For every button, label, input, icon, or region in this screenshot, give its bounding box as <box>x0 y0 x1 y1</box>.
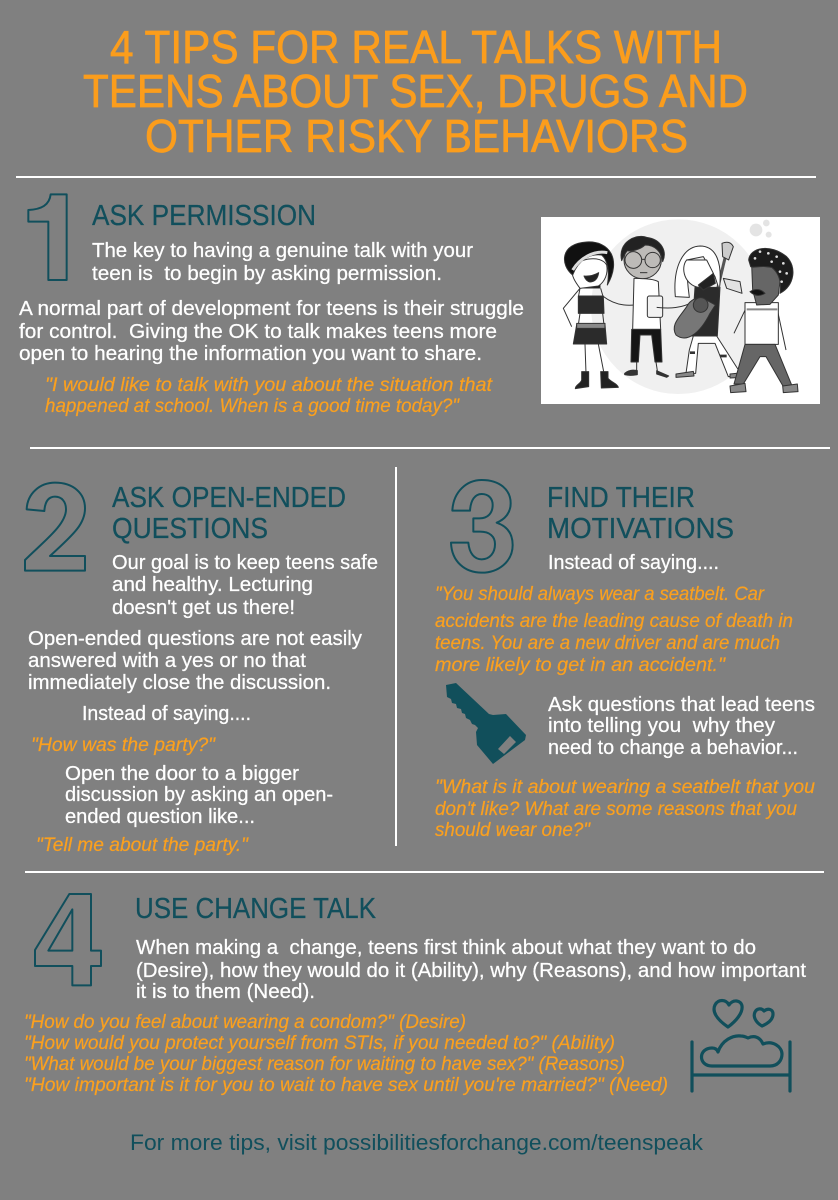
quote: change talk questions: "How would you protect yourself from STIs, if you needed to?" (Ability) <box>24 1032 615 1054</box>
quote: permission example: happened at school. When is a good time today?" <box>45 395 460 417</box>
quote: seatbelt question: don't like? What are some reasons that you <box>435 798 797 820</box>
text: change explanation: it is to them (Need). <box>136 981 315 1003</box>
text: ask questions: need to change a behavior... <box>548 737 798 759</box>
text: ask questions: into telling you why they <box>548 715 775 737</box>
figure: girl with headband <box>563 242 645 389</box>
quote: change talk questions: "What would be your biggest reason for waiting to have sex?" (Reasons) <box>24 1053 625 1075</box>
text: change explanation: (Desire), how they would do it (Ability), why (Reasons), and how important <box>136 960 806 982</box>
text: intro <box>92 240 473 285</box>
quote: seatbelt lecture <box>435 583 793 676</box>
quote: change talk questions: "How do you feel about wearing a condom?" (Desire) <box>24 1011 466 1033</box>
heading: find their motivations: MOTIVATIONS <box>547 513 734 545</box>
quote: seatbelt question: should wear one?" <box>435 819 591 841</box>
illustration: four teens <box>541 217 820 404</box>
quote: permission example <box>45 374 494 417</box>
text: open-ended definition <box>28 628 362 694</box>
quote: seatbelt lecture: more likely to get in an accident." <box>435 654 726 676</box>
text: open-ended definition: answered with a yes or no that <box>28 650 306 672</box>
panel: tip 1 ask permission <box>19 194 820 417</box>
text: open the door: discussion by asking an open- <box>65 784 333 806</box>
heading: use change talk: USE CHANGE TALK <box>135 893 377 925</box>
text: ask questions <box>548 694 815 759</box>
text: intro: The key to having a genuine talk with your <box>92 240 473 262</box>
number 2 outline <box>25 483 85 571</box>
text: ask questions: Ask questions that lead teens <box>548 694 815 716</box>
text: change explanation <box>136 937 806 1003</box>
text: open the door: Open the door to a bigger <box>65 763 299 785</box>
title <box>83 21 748 162</box>
panel: tip 4 use change talk <box>24 893 806 1096</box>
heading: ask permission: ASK PERMISSION <box>92 200 316 232</box>
quote: party question: "How was the party?" <box>31 734 216 756</box>
text: open-ended definition: immediately close the discussion. <box>28 672 331 694</box>
number 1 outline <box>28 194 67 280</box>
text: open the door: ended question like... <box>65 806 255 828</box>
quote: change talk questions <box>24 1011 668 1096</box>
text: intro: teen is to begin by asking permission. <box>92 263 442 285</box>
text: goal <box>112 552 378 619</box>
text: goal: and healthy. Lecturing <box>112 574 313 596</box>
panel: tip 3 find their motivations <box>435 480 815 841</box>
quote: seatbelt lecture: teens. You are a new driver and are much <box>435 632 780 654</box>
text: open-ended definition: Open-ended questions are not easily <box>28 628 362 650</box>
figure: boy with glasses <box>621 236 693 377</box>
quote: seatbelt question <box>435 776 815 841</box>
panel: tip 2 ask open-ended questions <box>25 482 378 856</box>
number 4 outline <box>35 894 101 985</box>
text: goal: Our goal is to keep teens safe <box>112 552 378 574</box>
text: instead of saying: Instead of saying.... <box>82 703 251 725</box>
text: explanation: for control. Giving the OK to talk makes teens more <box>19 321 497 343</box>
text: open the door <box>65 763 333 828</box>
heading: find their motivations: FIND THEIR <box>547 482 695 514</box>
title: OTHER RISKY BEHAVIORS <box>145 110 688 162</box>
text: explanation: A normal part of development for teens is their struggle <box>19 298 524 320</box>
icon: bed with hearts <box>692 1000 790 1091</box>
footer link: For more tips, visit possibilitiesforchange.com/teenspeak <box>130 1130 704 1155</box>
icon: key <box>446 683 526 764</box>
title: 4 TIPS FOR REAL TALKS WITH <box>110 21 722 73</box>
number 3 outline <box>451 480 513 573</box>
text: change explanation: When making a change, teens first think about what they want to do <box>136 937 756 959</box>
heading: ask open-ended questions: QUESTIONS <box>112 513 268 545</box>
title: TEENS ABOUT SEX, DRUGS AND <box>83 65 748 117</box>
quote: permission example: "I would like to talk with you about the situation that <box>45 374 494 396</box>
quote: seatbelt lecture: "You should always wear a seatbelt. Car <box>435 583 765 605</box>
quote: tell me about the party: "Tell me about the party." <box>36 834 249 856</box>
quote: seatbelt question: "What is it about wearing a seatbelt that you <box>435 776 815 798</box>
text: explanation <box>19 298 524 365</box>
figure: girl with guitar <box>674 242 743 378</box>
quote: seatbelt lecture: accidents are the leading cause of death in <box>435 610 793 632</box>
heading: find their motivations <box>547 482 734 545</box>
heading: ask open-ended questions <box>112 482 346 545</box>
text: goal: doesn't get us there! <box>112 597 295 619</box>
text: instead of saying: Instead of saying.... <box>548 552 719 574</box>
heading: ask open-ended questions: ASK OPEN-ENDED <box>112 482 346 514</box>
figure: boy blowing bubbles <box>723 248 798 393</box>
quote: change talk questions: "How important is it for you to wait to have sex until you're married?" (Need) <box>24 1074 668 1096</box>
text: explanation: open to hearing the information you want to share. <box>19 343 482 365</box>
